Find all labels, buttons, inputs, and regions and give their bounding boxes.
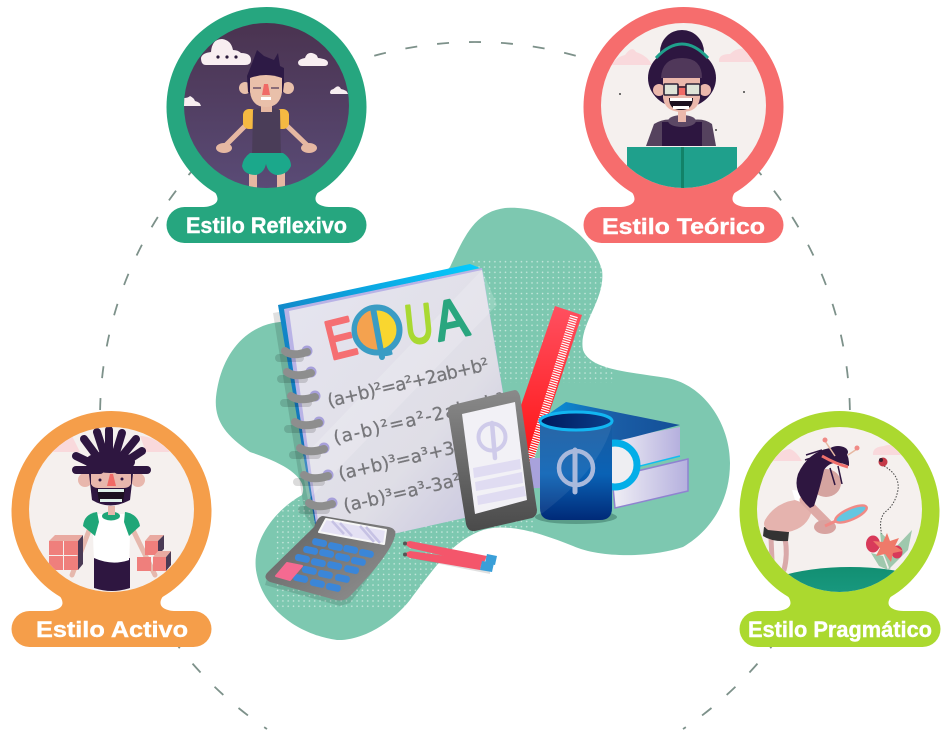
formulas: (a+b)³=a³+3a²b bbox=[336, 431, 486, 485]
sleeves bbox=[83, 512, 99, 536]
speckles bbox=[619, 91, 745, 131]
clouds bbox=[772, 445, 905, 461]
eyes bbox=[98, 478, 124, 482]
nose bbox=[107, 474, 116, 486]
legs bbox=[771, 538, 786, 570]
pin: Estilo Activo bbox=[12, 411, 212, 647]
face bbox=[663, 75, 700, 112]
mug bbox=[535, 412, 637, 524]
mouth bbox=[669, 98, 693, 110]
EQUA logo: U bbox=[402, 293, 436, 357]
red buds bbox=[866, 536, 880, 552]
lower book bbox=[612, 459, 688, 508]
ladybug bbox=[878, 458, 888, 466]
EQUA logo bbox=[319, 285, 473, 372]
scene: reading girl bbox=[601, 23, 766, 192]
arms bbox=[224, 124, 309, 147]
tablet text lines bbox=[473, 459, 526, 505]
pin shape bbox=[12, 411, 212, 647]
arms bbox=[72, 528, 155, 575]
upper book cover bbox=[550, 402, 680, 442]
pin: Estilo Teórico bbox=[584, 7, 784, 243]
lavender book edge bbox=[530, 458, 542, 488]
scene: meditating boy bbox=[184, 23, 349, 190]
notebook bbox=[273, 264, 522, 550]
pants bbox=[94, 558, 130, 591]
label: Estilo Teórico: Estilo Teórico bbox=[602, 214, 765, 239]
ears bbox=[653, 84, 663, 96]
spiral rings bbox=[279, 346, 338, 510]
tablet bbox=[448, 390, 537, 531]
tablet logo bbox=[478, 423, 506, 458]
ground bbox=[750, 567, 950, 633]
calculator bbox=[265, 516, 396, 606]
shorts bbox=[242, 153, 291, 175]
EQUA logo: Q bbox=[346, 294, 400, 364]
clouds bbox=[52, 436, 170, 452]
pink key bbox=[276, 563, 302, 580]
hair bun bbox=[660, 30, 704, 53]
legs bbox=[249, 174, 257, 188]
sleeves bbox=[243, 109, 254, 129]
dreadlocks bbox=[76, 430, 147, 470]
formulas: (a+b)²=a²+2ab+b² bbox=[325, 354, 491, 412]
books bbox=[530, 402, 688, 508]
body bbox=[764, 500, 812, 532]
nose bbox=[262, 84, 270, 95]
pens bbox=[403, 541, 497, 574]
dotted flight path bbox=[881, 466, 898, 535]
shorts bbox=[763, 527, 789, 541]
nose bbox=[678, 86, 686, 95]
plant leaves bbox=[871, 530, 912, 570]
beard bbox=[89, 474, 133, 506]
mug handle bbox=[593, 443, 637, 487]
central green blob bbox=[216, 208, 730, 640]
braces mouth bbox=[97, 489, 125, 502]
headband bbox=[822, 456, 848, 467]
mouth bbox=[261, 97, 271, 100]
clouds bbox=[612, 49, 756, 65]
pin: Estilo Pragmático bbox=[740, 411, 950, 647]
ears bbox=[78, 474, 90, 487]
label: Estilo Pragmático: Estilo Pragmático bbox=[748, 617, 932, 642]
torso bbox=[252, 108, 281, 153]
pin shape bbox=[740, 411, 940, 647]
scene: girl with magnifier bbox=[750, 427, 950, 633]
blocks right bbox=[137, 535, 171, 571]
label: Estilo Activo: Estilo Activo bbox=[36, 617, 188, 642]
formulas bbox=[325, 354, 507, 517]
blocks left bbox=[49, 535, 83, 570]
calculator keys bbox=[293, 538, 374, 592]
antennas bbox=[825, 441, 857, 456]
formulas: (a-b)³=a³-3a² bbox=[341, 469, 463, 517]
tablet screen bbox=[462, 402, 527, 514]
glasses bbox=[664, 84, 700, 95]
fringe bbox=[661, 58, 702, 78]
mug logo bbox=[559, 450, 593, 492]
clouds bbox=[184, 39, 348, 106]
hair bbox=[796, 448, 849, 508]
label: Estilo Reflexivo: Estilo Reflexivo bbox=[186, 213, 347, 238]
face bbox=[91, 472, 131, 488]
dashed orbit circle bbox=[100, 42, 850, 729]
notebook shadow bbox=[273, 310, 325, 545]
head bbox=[811, 469, 841, 497]
EQUA logo: E bbox=[319, 305, 362, 372]
notebook page bbox=[289, 270, 522, 550]
calculator screen bbox=[319, 519, 386, 544]
pin: Estilo Reflexivo bbox=[166, 7, 366, 243]
hair bbox=[247, 50, 284, 96]
face bbox=[250, 75, 282, 107]
shirt bbox=[93, 514, 130, 563]
neck bbox=[261, 106, 272, 112]
ears bbox=[239, 82, 249, 94]
book bbox=[627, 147, 737, 192]
ruler bbox=[503, 306, 582, 470]
flower bbox=[873, 533, 903, 562]
pin shape bbox=[584, 7, 784, 243]
arm bbox=[804, 500, 828, 524]
formulas: (a-b)²=a²-2ab+b² bbox=[331, 389, 507, 449]
EQUA logo: A bbox=[429, 285, 473, 352]
scene: boy with blocks bbox=[29, 427, 194, 592]
pin shape bbox=[166, 7, 366, 243]
body bbox=[646, 120, 716, 146]
notebook cover bbox=[278, 264, 480, 550]
magnifier bbox=[825, 502, 869, 526]
upper book pages bbox=[612, 427, 680, 473]
shirt strip bbox=[792, 490, 815, 505]
